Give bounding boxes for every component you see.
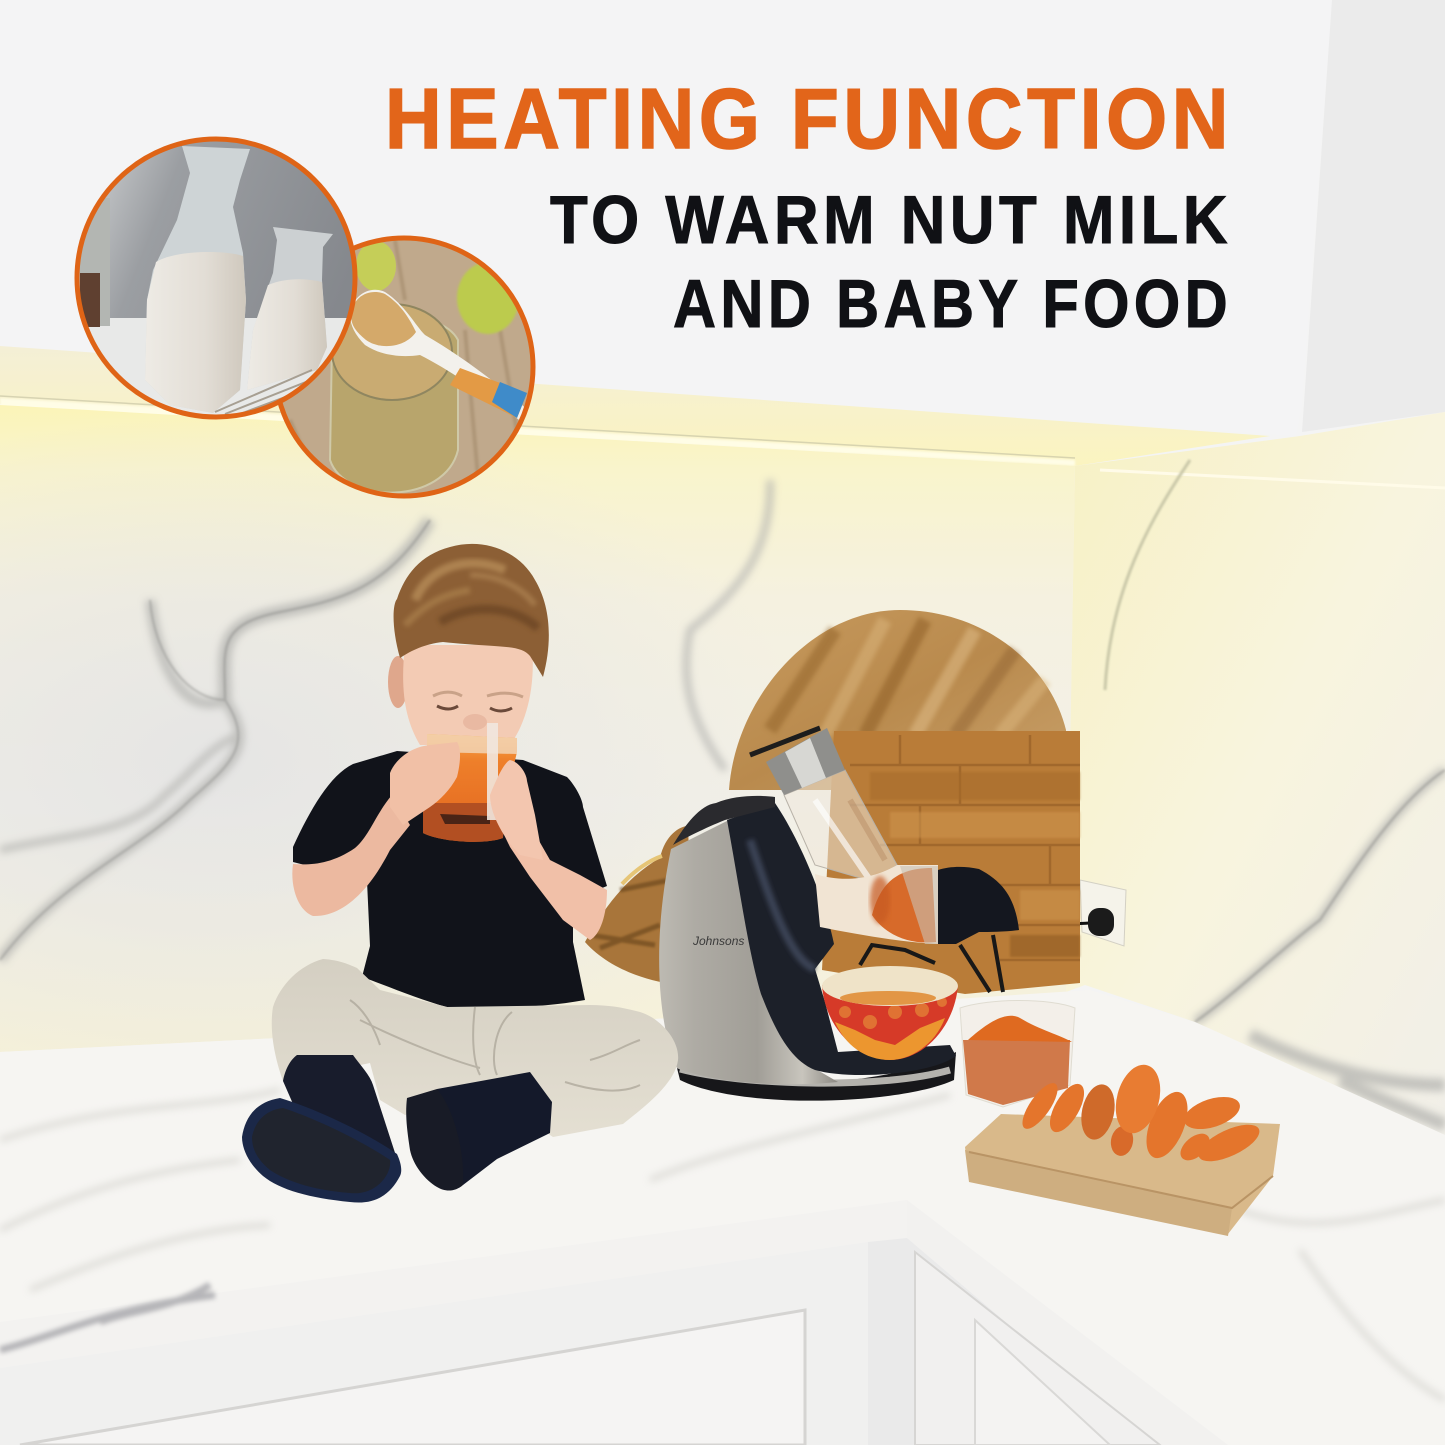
container of carrot pulp	[960, 1000, 1075, 1107]
boy's closed eyes and brows	[433, 692, 523, 711]
juicer black end cap	[938, 867, 1019, 944]
juicer top cap	[673, 796, 775, 845]
boy's hair	[394, 544, 549, 677]
wooden board with carrots	[965, 1060, 1280, 1236]
juicer	[659, 728, 1019, 1101]
boy's right boot	[406, 1072, 552, 1191]
boy's nose shadow	[463, 714, 487, 730]
boy's left hand	[390, 742, 460, 825]
boy's left arm	[292, 795, 410, 916]
boy's face	[403, 645, 533, 745]
boy's black t-shirt	[293, 751, 607, 1008]
juicer brand mark: Johnsons	[692, 934, 744, 948]
cutting boards behind juicer	[585, 610, 1080, 994]
boy's pants	[272, 959, 678, 1137]
glass of carrot juice	[423, 723, 517, 842]
boy's left boot	[242, 1055, 401, 1203]
bowl of carrot pulp	[822, 966, 958, 1060]
inset photo: milk bottles	[75, 135, 360, 420]
background: cabinet underside light strip	[0, 346, 1270, 466]
background: marble backsplash	[0, 405, 1445, 1135]
boy drinking juice	[242, 544, 678, 1203]
juicer base	[677, 1052, 956, 1101]
headline: HEATING FUNCTION	[385, 72, 1233, 167]
background: counter front edge	[0, 1200, 1228, 1445]
juicer black front panel	[727, 803, 956, 1075]
background: marble countertop	[0, 990, 1445, 1445]
background: lower cabinets	[0, 1238, 1160, 1445]
subheadline line 1: TO WARM NUT MILK	[550, 182, 1232, 258]
boy's right hand	[490, 760, 543, 860]
juicer steel body	[659, 820, 838, 1084]
inset photo: baby food jar	[270, 235, 540, 505]
boy's ear	[388, 656, 408, 708]
hair highlights	[405, 563, 538, 628]
juicer stand and cables	[860, 935, 1003, 992]
wall power socket and cord	[1020, 880, 1126, 946]
boy's right arm	[493, 810, 607, 940]
juicer screw housing with pulp	[815, 865, 938, 944]
juicer feed chute	[750, 728, 897, 882]
subheadline line 2: AND BABY FOOD	[673, 266, 1232, 342]
